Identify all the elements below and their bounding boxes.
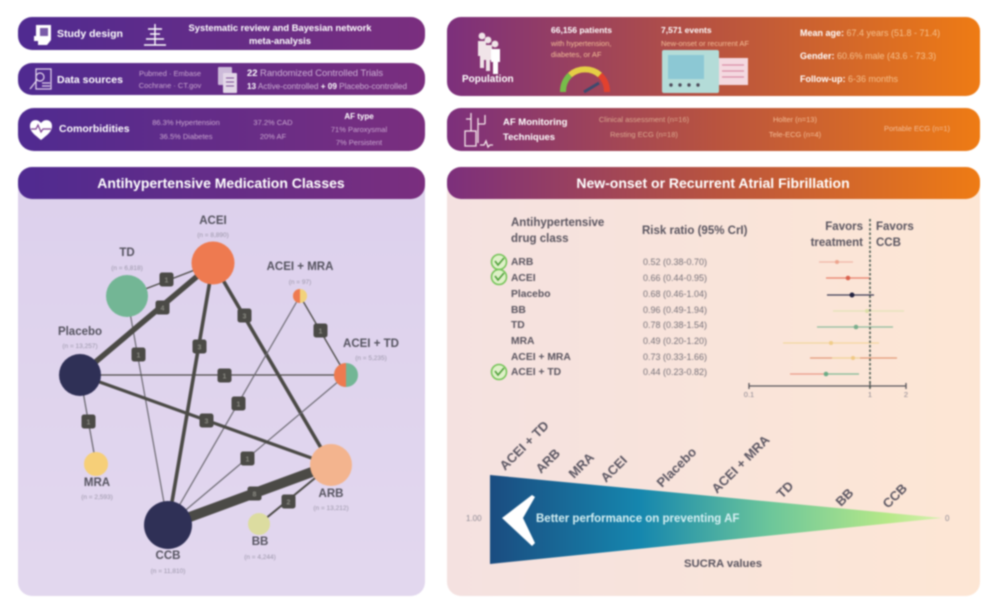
node: ARB <box>310 444 352 512</box>
text: trial counts: 22 Randomized Controlled Trials <box>247 67 383 78</box>
forest plot table <box>492 217 748 380</box>
node: ACEI + TD: ACEI + TD <box>343 338 399 350</box>
axis: 1 <box>868 390 872 399</box>
text: baseline characteristics: Gender: 60.6% male (43.6 - 73.3) <box>800 51 936 61</box>
text: patients: with hypertension, <box>550 39 611 48</box>
text: clinical and resting ECG: Resting ECG (n=18) <box>610 130 678 139</box>
icon: people group <box>478 33 500 74</box>
network chart <box>58 215 399 575</box>
text: baseline characteristics: Mean age: 67.4 years (51.8 - 71.4) <box>800 28 940 38</box>
node: Placebo <box>58 326 102 396</box>
node: Placebo: Placebo <box>58 326 102 338</box>
panel: data sources <box>18 63 425 95</box>
icon: documents <box>218 67 237 93</box>
node: ACEI + TD: (n = 5,235) <box>355 355 387 362</box>
panel: antihypertensive medication classes <box>18 167 425 596</box>
edge count badges: 1 <box>246 456 250 464</box>
ranked drug labels: TD <box>774 478 796 501</box>
node: ACEI + TD <box>334 338 399 387</box>
heading bar: new-onset AF <box>447 167 980 199</box>
node: ACEI: (n = 8,890) <box>197 232 229 239</box>
heading: study design: Study design <box>57 28 123 40</box>
text: baseline characteristics <box>800 28 940 84</box>
edge count badges: 3 <box>198 344 202 352</box>
point estimates <box>824 260 869 376</box>
text: trial counts: 13 Active-controlled + 09 Placebo-controlled <box>247 82 407 91</box>
text: portable ECG: Portable ECG (n=1) <box>884 124 951 133</box>
icon: check marks <box>492 254 506 380</box>
drug class names: ACEI <box>511 273 536 284</box>
text: patients: 66,156 patients <box>551 25 612 35</box>
edge count badges: 1 <box>237 402 241 408</box>
node: TD <box>106 247 148 317</box>
scale end: 0 <box>945 514 950 523</box>
text: AF type: 71% Paroxysmal <box>331 125 387 134</box>
node: ARB: ARB <box>319 488 343 500</box>
node: BB: BB <box>252 536 268 548</box>
edge count badges: 3 <box>243 314 247 320</box>
text: holter and tele-ECG: Tele-ECG (n=4) <box>769 130 822 139</box>
node: ARB: (n = 13,212) <box>313 505 349 512</box>
table headers: Antihypertensive <box>511 217 604 229</box>
axis title: SUCRA values <box>684 558 762 570</box>
favors labels: Favors <box>825 221 863 233</box>
reference line <box>869 219 871 389</box>
edge count badges: 1 <box>319 328 323 336</box>
ranked drug labels: ACEI + MRA <box>709 432 773 496</box>
network edges <box>80 263 346 525</box>
risk ratio values: 0.73 (0.33-1.66) <box>643 352 707 362</box>
SUCRA ranking wedge <box>466 418 950 570</box>
heading: comorbidities: Comorbidities <box>59 123 130 135</box>
heading: data sources: Data sources <box>57 74 123 86</box>
node: CCB: (n = 11,810) <box>151 568 185 575</box>
icon: study document <box>34 25 51 45</box>
text: baseline characteristics: Follow-up: 6-36 months <box>800 74 899 84</box>
ranked drug labels: ARB <box>533 446 563 476</box>
favors labels: treatment <box>811 237 863 249</box>
risk ratio values: 0.68 (0.46-1.04) <box>643 289 707 299</box>
text: CAD and AF: 37.2% CAD <box>253 118 293 127</box>
node: MRA: (n = 2,593) <box>81 494 113 501</box>
text: design description: meta-analysis <box>249 35 311 46</box>
heading: AF monitoring: AF Monitoring <box>503 117 568 128</box>
icon: monitoring device <box>465 113 493 147</box>
drug class names: ARB <box>511 257 533 268</box>
panel: population <box>447 17 980 96</box>
edge count badges: 8 <box>253 492 257 498</box>
favors labels <box>811 221 914 249</box>
node: CCB <box>144 501 192 575</box>
heading bar: new-onset AF: New-onset or Recurrent Atrial Fibrillation <box>576 175 850 191</box>
heading: AF monitoring: Techniques <box>503 132 555 143</box>
node: TD: (n = 6,818) <box>111 265 143 272</box>
risk ratio values: 0.78 (0.38-1.54) <box>643 320 707 330</box>
scale start: 1.00 <box>466 514 482 523</box>
node: Placebo: (n = 13,257) <box>62 343 98 350</box>
wedge caption: Better performance on preventing AF <box>536 513 739 525</box>
node: ACEI: ACEI <box>199 215 227 227</box>
text: AF type: AF type <box>344 112 374 121</box>
risk ratio values <box>643 257 707 377</box>
heading bar: medication classes: Antihypertensive Medication Classes <box>97 175 345 191</box>
panel: new-onset or recurrent AF <box>447 167 980 596</box>
edge count badges: 1 <box>223 374 227 380</box>
text: holter and tele-ECG: Holter (n=13) <box>773 115 817 124</box>
edge count badges: 4 <box>161 306 165 312</box>
ranked drug labels: CCB <box>880 481 910 511</box>
text: patients <box>550 25 612 59</box>
text: databases: Pubmed · Embase <box>139 69 201 78</box>
table headers: Risk ratio (95% CrI) <box>642 225 748 237</box>
node: MRA <box>81 452 113 501</box>
text: databases: Cochrane · CT.gov <box>139 81 202 90</box>
heading bar: medication classes <box>18 167 425 199</box>
edge count badges: 1 <box>137 352 141 360</box>
edge count badges: 1 <box>165 278 169 284</box>
text: AF type: 7% Persistent <box>336 138 383 147</box>
text: events <box>661 25 749 48</box>
node: MRA: MRA <box>84 477 110 489</box>
node: ACEI <box>192 215 234 284</box>
text: events: 7,571 events <box>661 25 712 35</box>
text: hypertension and diabetes: 86.3% Hypertension <box>152 118 220 127</box>
wedge gradient <box>490 475 942 564</box>
edge count badges: 3 <box>205 418 209 426</box>
axis <box>744 383 908 399</box>
panel: comorbidities <box>18 108 425 151</box>
edge count badges: 1 <box>87 420 91 426</box>
ranked drug labels: MRA <box>566 449 597 481</box>
edge count badges <box>82 273 327 508</box>
node: CCB: CCB <box>156 550 180 562</box>
node: TD: TD <box>119 247 135 259</box>
text: clinical and resting ECG: Clinical assessment (n=16) <box>599 115 690 124</box>
intervals <box>783 262 904 374</box>
drug class names: TD <box>511 320 525 331</box>
node: BB <box>244 513 276 561</box>
risk ratio values: 0.52 (0.38-0.70) <box>643 257 707 267</box>
axis: 2 <box>904 390 908 399</box>
node: ACEI + MRA <box>267 261 333 303</box>
risk ratio values: 0.96 (0.49-1.94) <box>643 305 707 315</box>
ranked drug labels: BB <box>833 485 856 509</box>
icon: gauge <box>563 69 607 92</box>
text: design description: Systematic review and Bayesian network <box>189 22 372 33</box>
ranked drug labels <box>497 418 910 511</box>
icon: data search <box>30 69 51 89</box>
drug class names: ACEI + MRA <box>511 352 571 363</box>
text: trial counts <box>247 67 407 91</box>
ranked drug labels: ACEI + TD <box>497 418 552 473</box>
risk ratio values: 0.66 (0.44-0.95) <box>643 273 707 283</box>
panel: AF monitoring techniques <box>447 108 980 151</box>
text: events: New-onset or recurrent AF <box>661 39 749 48</box>
icon: heart with pulse <box>30 120 52 140</box>
ranked drug labels: Placebo <box>654 444 699 490</box>
drug class names: BB <box>511 305 526 316</box>
forest plot chart <box>744 219 914 399</box>
panel: study design <box>18 17 425 50</box>
drug class names: MRA <box>511 336 535 347</box>
favors labels: Favors <box>876 221 914 233</box>
edge count badges: 2 <box>287 500 291 506</box>
drug class names: Placebo <box>511 289 550 300</box>
node: ACEI + MRA: (n = 97) <box>289 279 311 286</box>
risk ratio values: 0.44 (0.23-0.82) <box>643 367 707 377</box>
text: CAD and AF: 20% AF <box>260 132 287 141</box>
heading: population: Population <box>462 74 514 85</box>
node: ACEI + MRA: ACEI + MRA <box>267 261 333 273</box>
node: BB: (n = 4,244) <box>244 554 276 561</box>
ranked drug labels: ACEI <box>598 453 630 485</box>
axis: 0.1 <box>744 390 754 399</box>
risk ratio values: 0.49 (0.20-1.20) <box>643 336 707 346</box>
icon: left arrow <box>502 495 535 546</box>
text: AF type <box>331 112 387 147</box>
table headers: drug class <box>511 233 569 245</box>
text: patients: diabetes, or AF <box>551 50 602 59</box>
favors labels: CCB <box>876 237 901 249</box>
icon: holter monitor <box>662 50 748 93</box>
icon: network tree <box>144 24 166 45</box>
drug class names: ACEI + TD <box>511 367 561 378</box>
text: hypertension and diabetes: 36.5% Diabetes <box>160 132 213 141</box>
table headers <box>511 217 748 245</box>
drug class names <box>511 257 571 378</box>
